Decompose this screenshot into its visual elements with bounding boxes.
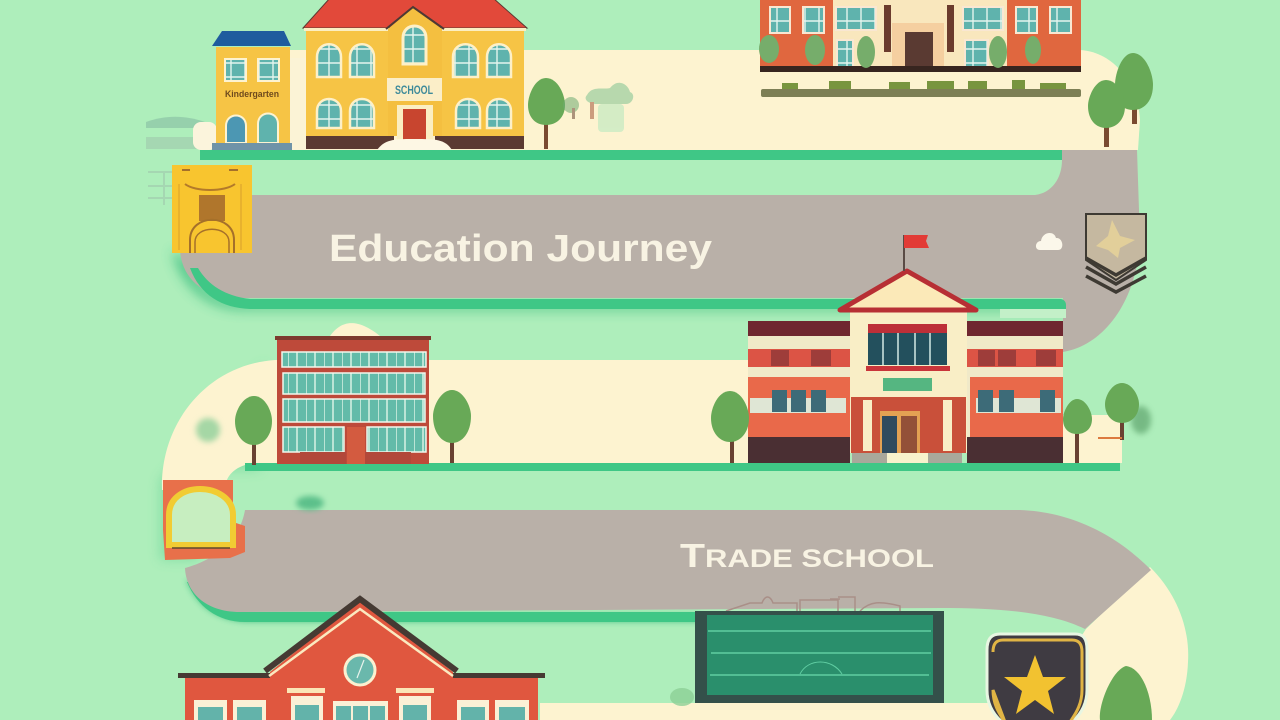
trees: upper right	[1088, 53, 1153, 147]
path: lower grey road	[185, 510, 1151, 629]
trees: beside yellow school	[528, 78, 633, 149]
faint scenery: left of kindergarten	[146, 117, 205, 205]
tree: bottom right	[1100, 666, 1152, 720]
trees: around glass college	[196, 390, 471, 510]
building: yellow primary school	[303, 0, 527, 150]
upper windows	[317, 44, 511, 128]
building: red middle school	[748, 271, 1063, 463]
small trees in front	[759, 35, 1041, 68]
path: middle cream road	[160, 323, 1122, 560]
trees: around red middle school	[711, 383, 1151, 463]
sign text: kindergarten: Kindergarten	[225, 89, 279, 99]
building: kindergarten	[193, 31, 306, 150]
building: red elementary school	[178, 599, 545, 720]
icon: shield with star	[987, 634, 1087, 720]
faint sketch above chalkboard	[726, 597, 900, 611]
chalkboard	[670, 611, 944, 706]
sign text: school: SCHOOL	[395, 83, 433, 97]
icon: flag	[903, 235, 929, 271]
path: upper grey road	[172, 150, 1140, 352]
icon: cloud	[1036, 233, 1062, 250]
building: brick high school	[759, 0, 1081, 97]
building: glass college	[275, 336, 431, 464]
path: upper cream road	[290, 50, 1140, 150]
icon: arch gate	[163, 480, 245, 560]
planter strip	[761, 80, 1081, 97]
icon: yellow gate block	[172, 165, 252, 253]
label: Trade School: TRADE SCHOOL	[680, 537, 934, 574]
path: lower cream road	[540, 567, 1188, 720]
title: Education Journey: Education Journey	[329, 228, 712, 270]
icon: military rank badge	[1086, 214, 1146, 292]
